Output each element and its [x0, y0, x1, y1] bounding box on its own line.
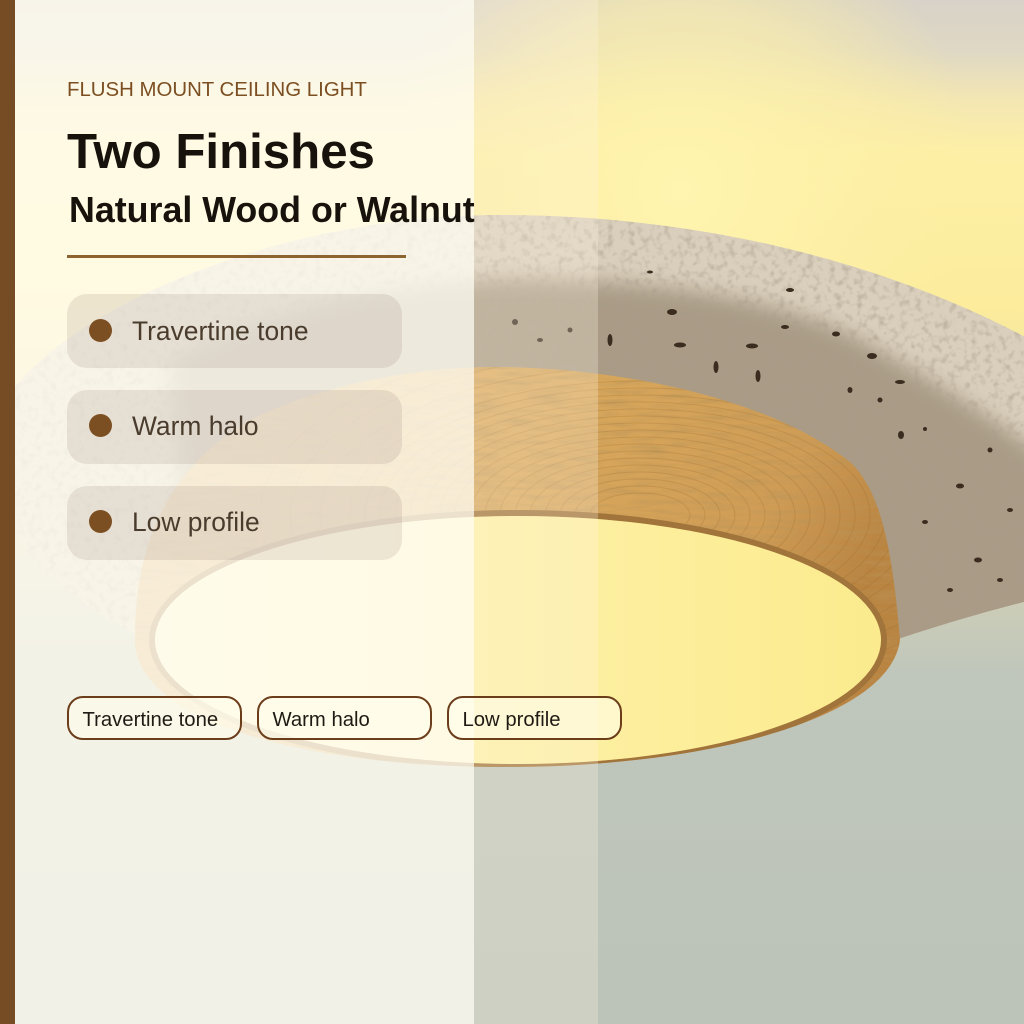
travertine disc: [16, 215, 1024, 638]
bullet dot: [89, 319, 112, 342]
eyebrow label: FLUSH MOUNT CEILING LIGHT: [67, 79, 367, 101]
glowing lens: [155, 516, 881, 764]
wood rim: [152, 513, 884, 767]
wood end-grain rings: [474, 367, 900, 649]
row text: Low profile: [132, 507, 260, 537]
left brown bar: [0, 0, 15, 1024]
bullet dot: [89, 414, 112, 437]
disc shadow: [178, 271, 1024, 638]
row text: Travertine tone: [132, 316, 309, 346]
tag pill: low profile: Low profile: [462, 708, 561, 730]
tag pill: low profile: [447, 696, 622, 740]
tag pill: warm halo: [257, 696, 432, 740]
feature row: low profile: [67, 486, 402, 560]
travertine pits: [512, 270, 1013, 592]
subtitle: Natural Wood or Walnut: [69, 190, 475, 230]
divider rule: [67, 255, 406, 258]
tag pill: travertine tone: [67, 696, 242, 740]
row text: Warm halo: [132, 411, 259, 441]
wood cylinder: [135, 367, 900, 767]
veil: left text panel: [15, 0, 474, 1024]
feature row: travertine tone: [67, 294, 402, 368]
feature row: warm halo: [67, 390, 402, 464]
tag pill: warm halo: Warm halo: [272, 708, 370, 730]
bullet dot: [89, 510, 112, 533]
main title: Two Finishes: [67, 124, 375, 179]
tag pill: travertine tone: Travertine tone: [82, 708, 218, 730]
veil: middle band: [474, 0, 598, 1024]
